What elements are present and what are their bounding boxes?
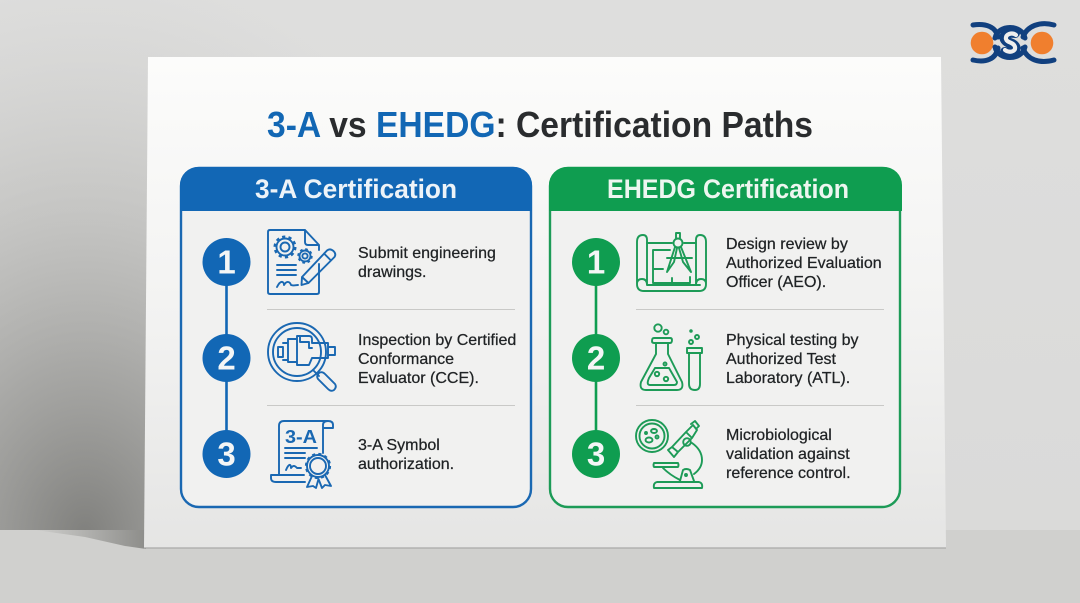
icon: blueprint with compass <box>637 233 706 291</box>
step 1 text: Officer (AEO). <box>726 274 826 291</box>
step 3 text: Microbiological <box>726 427 832 444</box>
step 2 text: Physical testing by <box>726 332 859 349</box>
step 1 number: 1 <box>217 244 236 280</box>
step connector <box>225 262 228 454</box>
step 3 text: reference control. <box>726 465 851 482</box>
panel heading: 3-A Certification <box>255 174 457 204</box>
step 1 text: Authorized Evaluation <box>726 255 882 272</box>
step 1 number: 1 <box>587 244 605 280</box>
step 2 number: 2 <box>587 340 605 376</box>
dividers <box>636 310 884 406</box>
step 3 number <box>572 430 620 478</box>
icon: magnifier over machine part <box>268 323 336 391</box>
step 2 number <box>202 334 250 382</box>
step 1 text: drawings. <box>358 264 426 281</box>
step 1 text: Design review by <box>726 236 848 253</box>
step 2 text: Laboratory (ATL). <box>726 370 850 387</box>
step 1 number <box>202 238 250 286</box>
step 2 number <box>572 334 620 382</box>
step 3 number: 3 <box>587 436 605 472</box>
panel: EHEDG Certification <box>549 167 902 507</box>
logo: DSC <box>971 24 1054 62</box>
panel frame <box>181 168 531 507</box>
step 2 number: 2 <box>217 340 236 376</box>
title: 3-A vs EHEDG: Certification Paths <box>267 104 813 145</box>
step 3 text: validation against <box>726 446 850 463</box>
panel heading: EHEDG Certification <box>607 174 849 204</box>
dividers <box>267 310 515 406</box>
step 1 text: Submit engineering <box>358 245 496 262</box>
icon: flask and test tube <box>641 324 702 390</box>
step 2 text: Evaluator (CCE). <box>358 370 479 387</box>
white display card <box>144 57 946 548</box>
panel frame <box>550 168 900 507</box>
step connector <box>595 262 597 454</box>
step 2 text: Conformance <box>358 351 454 368</box>
step 3 text: 3-A Symbol <box>358 437 440 454</box>
icon: petri dish and microscope <box>636 420 702 488</box>
step 2 text: Authorized Test <box>726 351 837 368</box>
step 3 text: authorization. <box>358 456 454 473</box>
panel: 3-A Certification <box>180 167 532 507</box>
icon: 3-A certificate with rosette: 3-A <box>285 426 317 447</box>
panel header <box>549 167 902 211</box>
panel header <box>180 167 532 211</box>
step 2 text: Inspection by Certified <box>358 332 516 349</box>
icon: drawing with gears and pencil <box>268 230 335 294</box>
step 3 number <box>202 430 250 478</box>
icon: 3-A certificate with rosette <box>271 421 333 488</box>
step 1 number <box>572 238 620 286</box>
step 3 number: 3 <box>217 436 236 472</box>
